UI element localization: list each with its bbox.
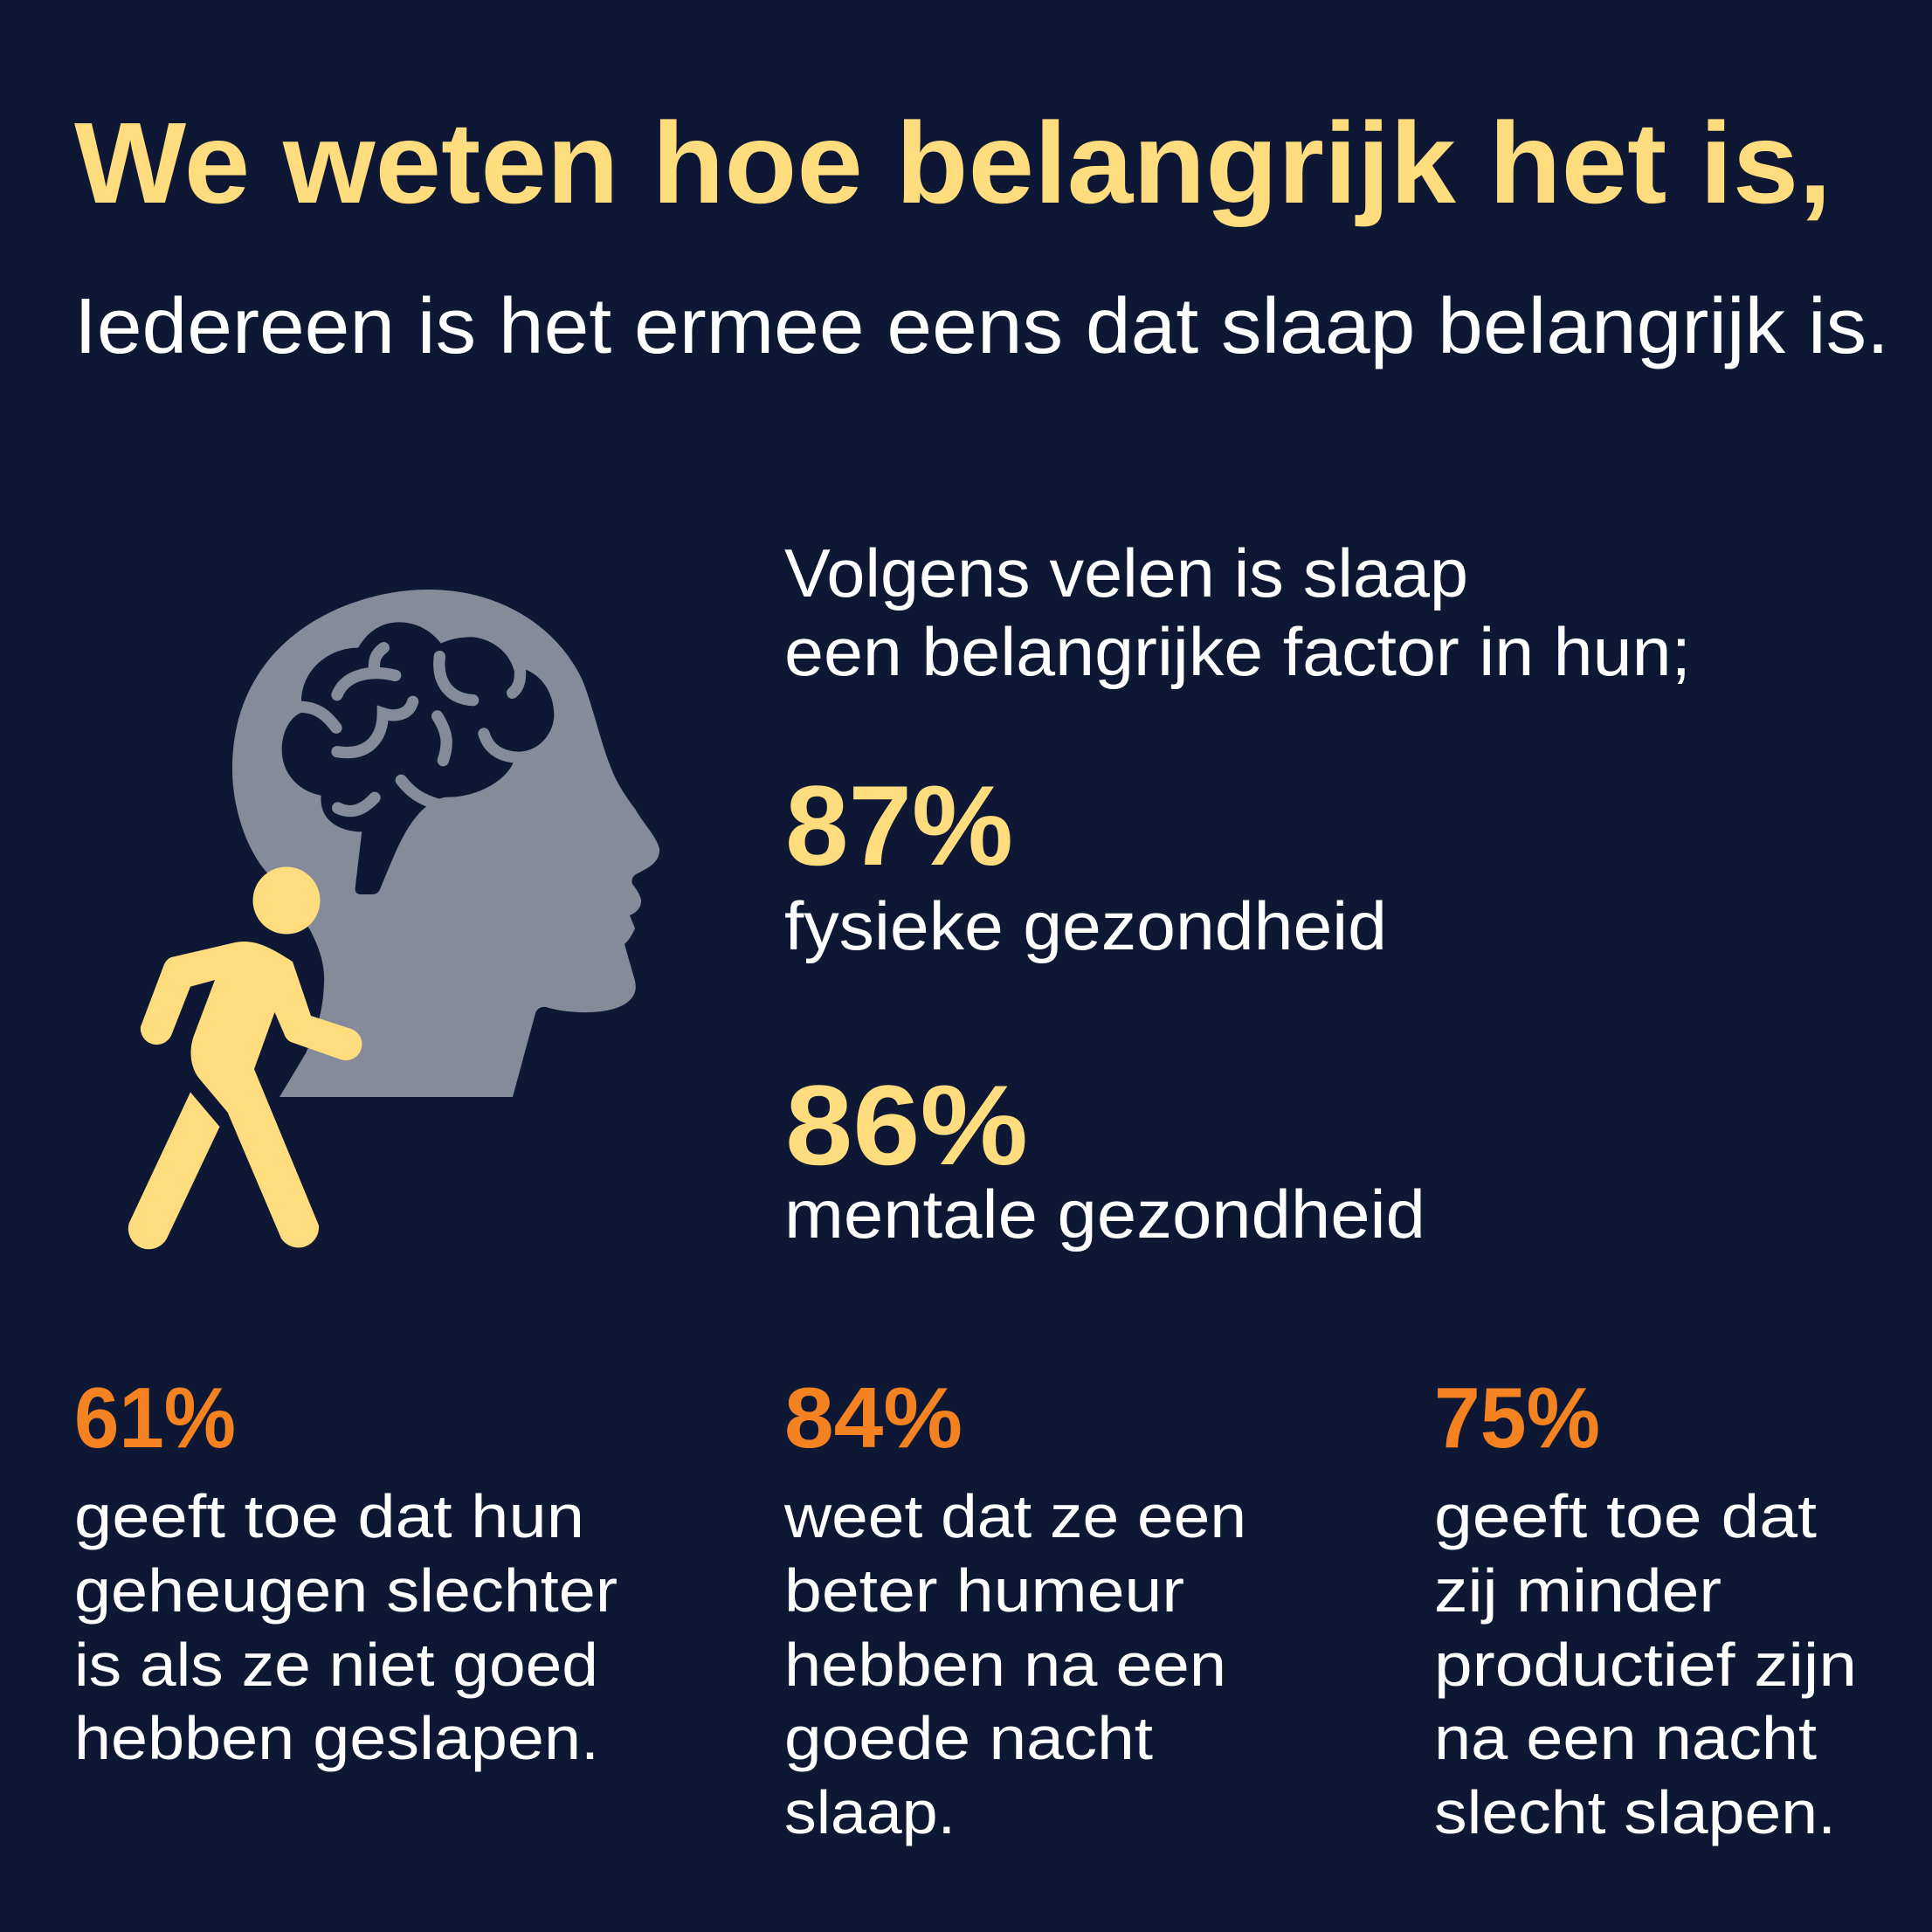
text block: intro [784,535,1691,690]
statistic: 75% [1434,1370,1857,1846]
statistic: 75%: slecht slapen. [1434,1778,1836,1846]
statistic: 87%: 87% [785,762,1013,889]
statistic: 84%: 84% [784,1370,963,1466]
statistic: 61%: hebben geslapen. [74,1704,599,1772]
text block: intro: een belangrijke factor in hun; [784,613,1691,690]
text block: intro: Volgens velen is slaap [784,535,1468,611]
statistic: 84%: weet dat ze een [783,1482,1246,1550]
subtitle: Iedereen is het ermee eens dat slaap belangrijk is. [74,283,1889,370]
icon: head silhouette [232,590,659,1097]
statistic: 86%: mentale gezondheid [784,1176,1425,1252]
statistic: 87% [784,762,1387,964]
statistic: 84%: slaap. [784,1778,956,1846]
statistic: 87%: fysieke gezondheid [784,887,1387,964]
statistic: 86%: 86% [785,1061,1028,1189]
icon: walking person [128,866,362,1249]
icon: head with brain and walking person [128,590,659,1249]
statistic: 75%: productief zijn [1434,1631,1857,1699]
statistic: 75%: geeft toe dat [1434,1482,1817,1550]
title: We weten hoe belangrijk het is, [74,99,1832,227]
statistic: 86% [784,1061,1425,1252]
statistic: 61%: is als ze niet goed [74,1631,598,1699]
statistic: 61%: geeft toe dat hun [74,1482,584,1550]
statistic: 61% [74,1370,618,1772]
statistic: 84%: goede nacht [784,1704,1153,1772]
statistic: 75%: zij minder [1434,1556,1722,1625]
statistic: 84%: beter humeur [784,1556,1184,1625]
statistic: 61%: 61% [74,1370,236,1466]
statistic: 75%: 75% [1434,1370,1600,1466]
icon: brain [282,622,554,894]
statistic: 84%: hebben na een [784,1631,1226,1699]
statistic: 75%: na een nacht [1434,1704,1817,1772]
statistic: 84% [783,1370,1246,1846]
statistic: 61%: geheugen slechter [74,1556,618,1625]
